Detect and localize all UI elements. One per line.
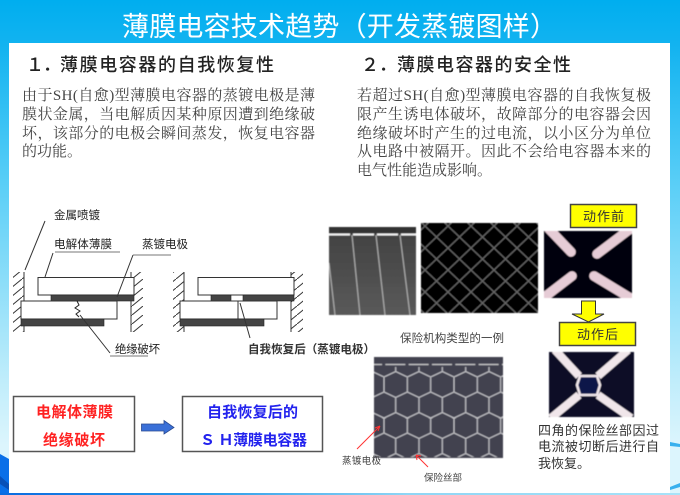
text block: self recovery description: 由于SH(自愈)型薄膜电容器的蒸镀电极是薄: [22, 86, 315, 104]
photo: striped pattern: [329, 227, 416, 315]
text block: fuse explanation: 电流被切断后进行自: [538, 439, 659, 454]
text block: safety description: 电气性能造成影响。: [357, 161, 492, 179]
label box: after operation: 动作后: [577, 327, 618, 342]
text block: self recovery description: 的功能。: [22, 143, 82, 160]
label: after self recovery: 自我恢复后（蒸镀电极）: [248, 342, 375, 356]
photo: fuse before operation: [542, 229, 632, 299]
label: fuse section: 保险丝部: [424, 472, 462, 484]
label box: after operation: [560, 322, 636, 346]
label: insulation breakdown: 绝缘破坏: [115, 342, 160, 356]
photo: diamond grid pattern: [421, 223, 538, 313]
text block: fuse explanation: 我恢复。: [538, 456, 590, 471]
arrow: before to after: [572, 301, 604, 322]
caption: fuse mechanism example: 保险机构类型的一例: [400, 331, 504, 345]
label box: before operation: [570, 204, 636, 228]
box: recovered SH film capacitor: 自我恢复后的: [207, 403, 298, 421]
label: evaporated electrode: 蒸镀电极: [142, 237, 188, 251]
label box: before operation: 动作前: [583, 209, 624, 224]
arrow: flow: [142, 420, 174, 434]
photo: hexagon pattern: [342, 357, 503, 484]
text block: self recovery description: 坏，该部分的电极会瞬间蒸发，恢复电容器: [22, 124, 315, 142]
text block: fuse explanation: [538, 423, 659, 471]
flow: breakdown to recovered capacitor: [14, 396, 322, 452]
diagram: dielectric breakdown cross section: [13, 208, 188, 356]
heading: safety: 薄膜电容器的安全性: [397, 54, 571, 75]
box: dielectric film breakdown: 绝缘破坏: [43, 431, 105, 449]
section 2: [357, 54, 651, 179]
section 1: [22, 55, 315, 160]
heading: self recovery: １: [26, 55, 44, 75]
text block: safety description: [357, 86, 651, 179]
box: dielectric film breakdown: 电解体薄膜: [36, 403, 113, 421]
photo: fuse after operation: [549, 350, 634, 418]
arrow: fuse pointer: [416, 455, 428, 467]
diagram: after self recovery cross section: [173, 272, 375, 356]
text block: safety description: 从电路中被隔开。因此不会给电容器本来的: [357, 142, 651, 160]
heading: safety: ２: [361, 55, 379, 75]
text block: fuse explanation: 四角的保险丝部因过: [538, 423, 659, 438]
label: evaporated electrode: 蒸镀电极: [342, 455, 381, 467]
bottom blue strip: [0, 493, 680, 495]
box: recovered SH film capacitor: Ｓ Ｈ薄膜电容器: [200, 431, 307, 449]
heading: self recovery: 薄膜电容器的自我恢复性: [60, 55, 274, 75]
text block: safety description: 限产生诱电体破坏，故障部分的电容器会因: [357, 105, 651, 123]
text block: self recovery description: 膜状金属，当电解质因某种原因遭到绝缘破: [22, 105, 315, 123]
arrow: electrode pointer: [357, 426, 380, 449]
text block: safety description: 绝缘破坏时产生的过电流，以小区分为单位: [357, 124, 651, 142]
heading: safety: ．: [379, 55, 397, 75]
heading: self recovery: ．: [43, 55, 61, 75]
text block: safety description: 若超过SH(自愈)型薄膜电容器的自我恢复极: [357, 86, 651, 104]
box: recovered SH film capacitor: [182, 396, 322, 452]
label: metal spray: 金属喷镀: [54, 208, 100, 222]
label: dielectric film: 电解体薄膜: [54, 237, 112, 251]
text block: self recovery description: [22, 86, 315, 160]
box: dielectric film breakdown: [14, 396, 134, 452]
title: 薄膜电容技术趋势（开发蒸镀图样）: [122, 12, 557, 42]
